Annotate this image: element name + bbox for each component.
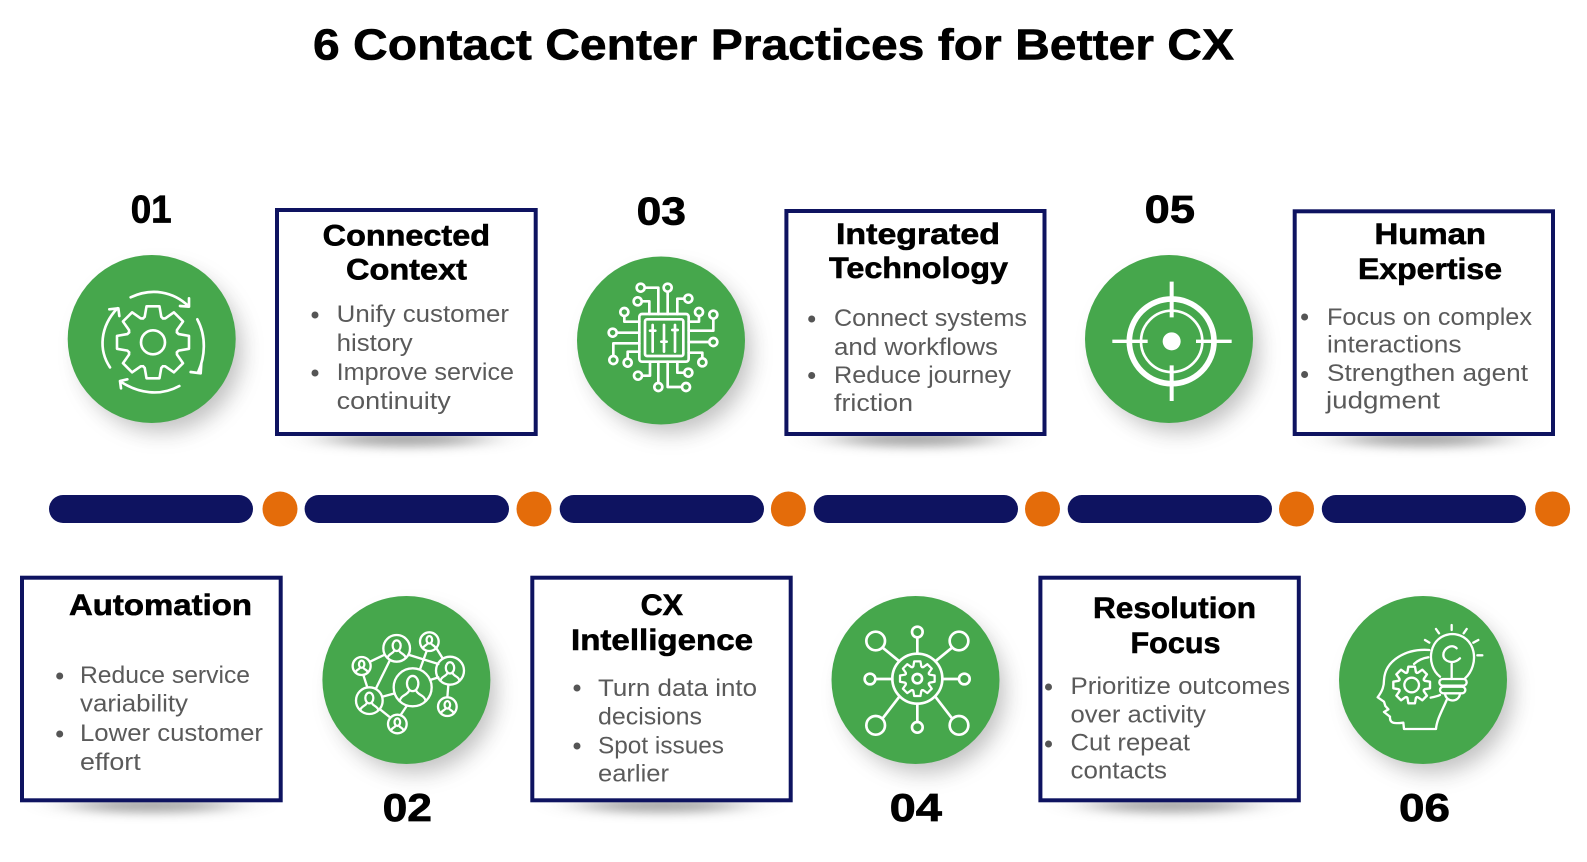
panel: Automation [22, 578, 281, 813]
bullet list: Lower customer [80, 720, 263, 747]
bullet list: variability [80, 691, 188, 718]
bullet list: Reduce service [80, 662, 250, 689]
panel: Integrated Technology [786, 211, 1044, 447]
bullet list: earlier [598, 760, 669, 788]
step 02: circle with people network icon [322, 596, 496, 773]
heading: Expertise [1358, 253, 1502, 286]
bullet list: Spot issues [598, 732, 724, 760]
bullet list [808, 305, 1027, 417]
bullet list: friction [834, 390, 913, 417]
heading: Human [1374, 218, 1486, 251]
bullet list: and workflows [834, 334, 998, 361]
heading [323, 220, 490, 286]
bullet list: Reduce journey [834, 362, 1011, 389]
icon: gear with cycle arrows [103, 292, 204, 392]
heading [1358, 218, 1502, 286]
bullet list: effort [80, 749, 141, 776]
bullet list: continuity [337, 388, 451, 415]
heading: Automation [69, 589, 252, 622]
panel: Connected Context [277, 210, 536, 447]
icon: head with gear and lightbulb [1378, 625, 1482, 729]
heading: Intelligence [571, 624, 753, 657]
bullet list [1045, 673, 1290, 784]
step 03: circle with chip icon [577, 256, 751, 433]
panel: CX Intelligence [532, 578, 791, 813]
icon: circuit chip with sliders [609, 284, 717, 391]
title: 6 Contact Center Practices for Better CX [313, 20, 1234, 70]
number 05: 05 [1145, 189, 1195, 232]
heading: CX [641, 589, 683, 622]
timeline bar with orange dots [49, 492, 1570, 526]
heading: Resolution [1093, 592, 1256, 625]
bullet list: history [337, 330, 413, 357]
heading: Connected [323, 220, 490, 252]
bullet list: contacts [1070, 758, 1167, 784]
heading [829, 218, 1008, 285]
bullet list [574, 675, 757, 788]
bullet list: Focus on complex [1327, 304, 1532, 331]
bullet list: Unify customer [337, 301, 509, 328]
bullet list [1301, 304, 1532, 414]
heading: Focus [1130, 627, 1220, 660]
icon: target crosshair [1112, 282, 1232, 401]
bullet list: Prioritize outcomes [1070, 673, 1290, 700]
step 06: circle with head and lightbulb icon [1339, 596, 1513, 773]
heading: Integrated [836, 218, 1000, 251]
number 02: 02 [383, 787, 432, 830]
heading [1093, 592, 1256, 660]
bullet list: Cut repeat [1070, 730, 1190, 756]
bullet list: Turn data into [598, 675, 757, 702]
step 04: circle with gear network icon [832, 596, 1005, 773]
heading: Context [346, 253, 467, 286]
number 04: 04 [890, 787, 942, 830]
bullet list: Improve service [337, 359, 514, 386]
number 03: 03 [637, 191, 686, 234]
heading [571, 589, 753, 657]
number 01: 01 [131, 188, 172, 232]
panel: Resolution Focus [1040, 578, 1299, 813]
bullet list [312, 301, 514, 415]
heading: Technology [829, 252, 1008, 285]
number 06: 06 [1399, 787, 1450, 830]
icon: people network [353, 632, 464, 733]
bullet list: interactions [1327, 332, 1462, 359]
bullet list: decisions [598, 704, 702, 731]
step 01: circle with gear icon [68, 255, 242, 432]
bullet list [56, 662, 263, 776]
bullet list: over activity [1070, 702, 1206, 729]
bullet list: Strengthen agent [1327, 360, 1528, 387]
icon: gear hub network [865, 627, 970, 735]
panel: Human Expertise [1295, 211, 1553, 447]
bullet list: judgment [1325, 387, 1440, 414]
bullet list: Connect systems [834, 305, 1027, 332]
step 05: circle with target icon [1085, 255, 1259, 432]
